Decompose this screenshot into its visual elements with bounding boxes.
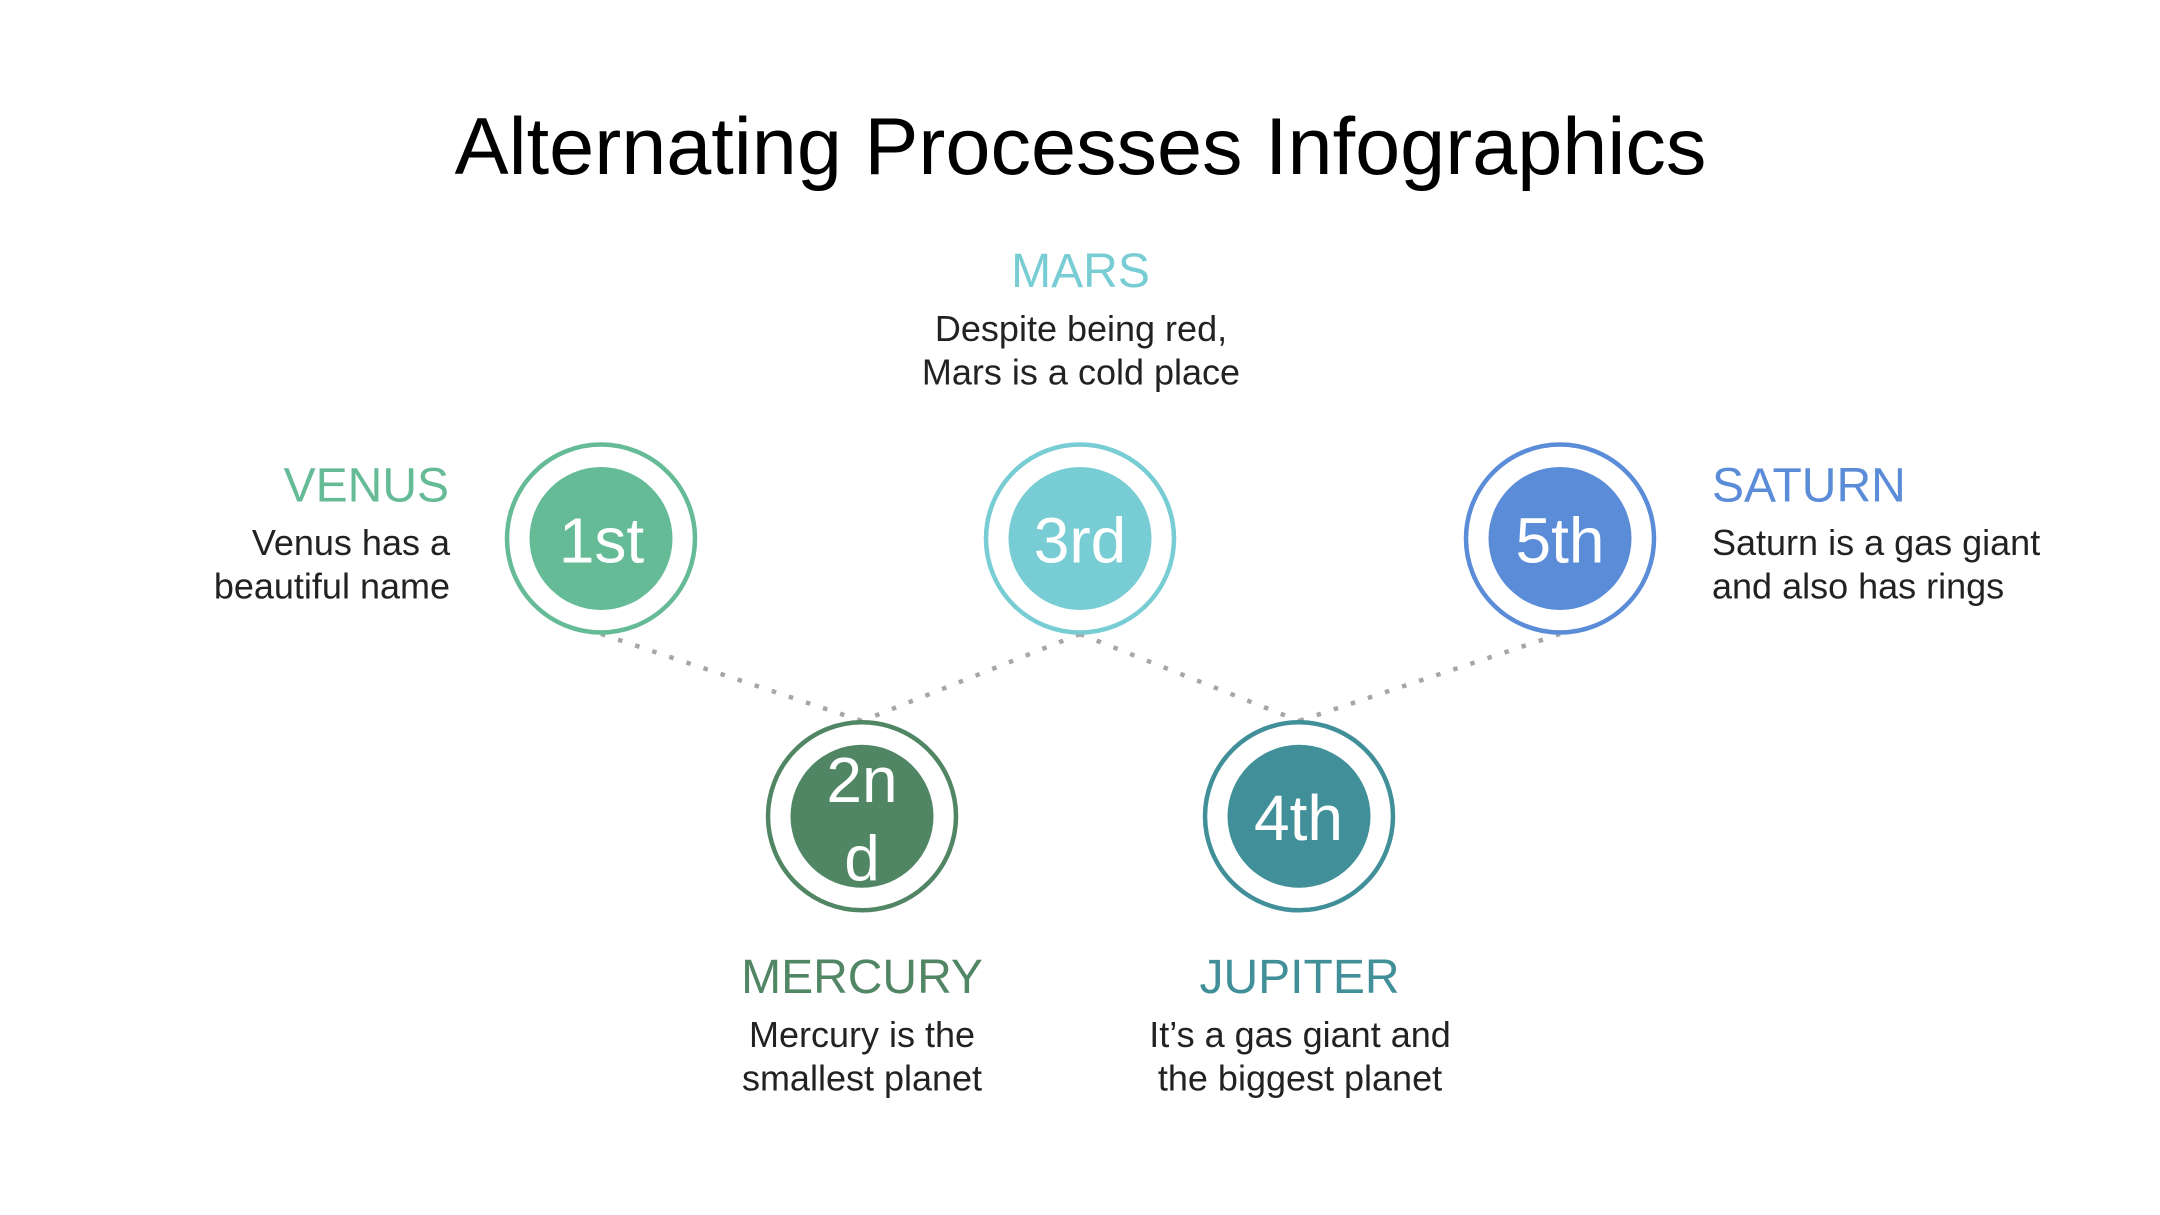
text: Mars description: Mars is a cold place (922, 352, 1240, 392)
step 1: Venus (214, 444, 695, 632)
heading: Mars: MARS (1011, 245, 1150, 298)
text: Venus description: Venus has a (252, 522, 451, 563)
badge: 3rd: 3rd (1034, 504, 1126, 576)
heading: Jupiter: JUPITER (1199, 951, 1400, 1004)
text: Venus description: beautiful name (214, 566, 450, 606)
text: Mercury description: Mercury is the (749, 1014, 975, 1055)
text: Mercury description: smallest planet (742, 1058, 982, 1098)
heading: Saturn: SATURN (1712, 460, 1906, 512)
text: Mars description: Despite being red, (935, 308, 1227, 349)
badge: 1st: 1st (559, 504, 644, 576)
text: Saturn description: Saturn is a gas giant (1712, 522, 2040, 563)
badge: 5th: 5th (1516, 504, 1604, 576)
text: Jupiter description: the biggest planet (1158, 1058, 1442, 1098)
badge: 4th: 4th (1254, 782, 1343, 854)
badge: 2nd: 2n (826, 744, 898, 816)
title: Alternating Processes Infographics (455, 102, 1706, 192)
badge: 4th (1205, 722, 1393, 910)
dotted connectors (601, 634, 1560, 721)
badge: 2nd (768, 722, 956, 910)
badge: 3rd (986, 444, 1174, 632)
step 3: Mars (922, 245, 1240, 632)
step 4: Jupiter (1149, 722, 1451, 1098)
text: Jupiter description: It’s a gas giant and (1149, 1014, 1451, 1055)
badge: 5th (1466, 444, 1654, 632)
heading: Venus: VENUS (284, 460, 449, 512)
badge: 2nd: d (844, 822, 880, 894)
badge: 1st (507, 444, 695, 632)
step 5: Saturn (1466, 444, 2040, 632)
heading: Mercury: MERCURY (741, 951, 983, 1004)
step 2: Mercury (741, 722, 983, 1098)
text: Saturn description: and also has rings (1712, 566, 2004, 606)
